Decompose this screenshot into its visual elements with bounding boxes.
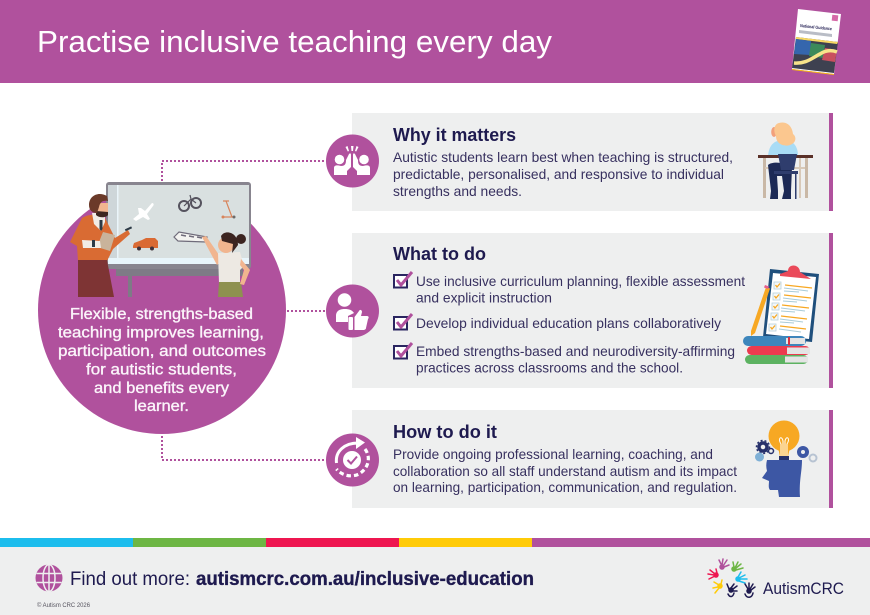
checklist item 1	[394, 272, 745, 306]
icon: globe	[36, 564, 62, 592]
checklist item 1: and explicit instruction	[416, 290, 552, 306]
call to action: Find out more:	[70, 569, 190, 590]
message text: for autistic students,	[86, 362, 237, 378]
text: how to do it: collaboration so all staff understand autism and its impact	[393, 464, 737, 479]
panel: how to do it	[352, 410, 833, 508]
connector lines	[162, 161, 327, 460]
whiteboard	[106, 182, 251, 297]
icon: student at desk	[758, 123, 813, 199]
illustration: teacher and student at whiteboard	[70, 182, 251, 297]
checklist item 1: Use inclusive curriculum planning, flexible assessment	[416, 274, 745, 289]
icon: clipboard and books	[743, 265, 819, 364]
text: why it matters: Autistic students learn best when teaching is structured,	[393, 150, 733, 165]
icon: cycle with check	[326, 434, 379, 486]
text: how to do it	[393, 447, 737, 495]
heading: why it matters: Why it matters	[393, 125, 516, 145]
student	[202, 232, 250, 297]
message text	[58, 306, 266, 415]
header banner	[0, 0, 870, 83]
checklist item 3	[394, 343, 735, 376]
message text: and benefits every	[94, 380, 229, 397]
logo	[708, 559, 844, 598]
heading: what to do: What to do	[393, 244, 486, 264]
panel: key message circle	[38, 182, 286, 434]
copyright: © Autism CRC 2026	[37, 602, 91, 609]
icon: person with thumbs up	[326, 284, 379, 338]
heading: how to do it: How to do it	[393, 422, 497, 442]
booklet cover: National Guidance	[800, 23, 833, 31]
title: Practise inclusive teaching every day	[37, 24, 553, 59]
text: why it matters: strengths and needs.	[393, 184, 522, 199]
text: how to do it: on learning, participation, communication, and regulation.	[393, 480, 737, 495]
checklist item 3: Embed strengths-based and neurodiversity-affirming	[416, 344, 735, 359]
text: why it matters: predictable, personalised, and responsive to individual	[393, 167, 724, 182]
icon: high five	[326, 134, 379, 188]
message text: Flexible, strengths-based	[70, 306, 253, 323]
colour stripe	[0, 538, 870, 547]
booklet cover	[792, 9, 841, 75]
message text: learner.	[134, 398, 189, 415]
icon: head with light bulb and gears	[755, 420, 816, 497]
checklist item 3: practices across classrooms and the school.	[416, 360, 683, 376]
call to action: autismcrc.com.au/inclusive-education	[196, 569, 534, 590]
checklist item 2: Develop individual education plans collaboratively	[416, 316, 721, 331]
footer	[0, 547, 870, 615]
message text: teaching improves learning,	[58, 324, 264, 342]
text: how to do it: Provide ongoing professional learning, coaching, and	[393, 447, 713, 462]
teacher	[70, 194, 132, 297]
panel: what to do	[352, 233, 833, 388]
message text: participation, and outcomes	[58, 343, 266, 360]
panel: why it matters	[352, 113, 833, 211]
logo: AutismCRC	[763, 579, 844, 598]
text: why it matters	[393, 150, 733, 199]
